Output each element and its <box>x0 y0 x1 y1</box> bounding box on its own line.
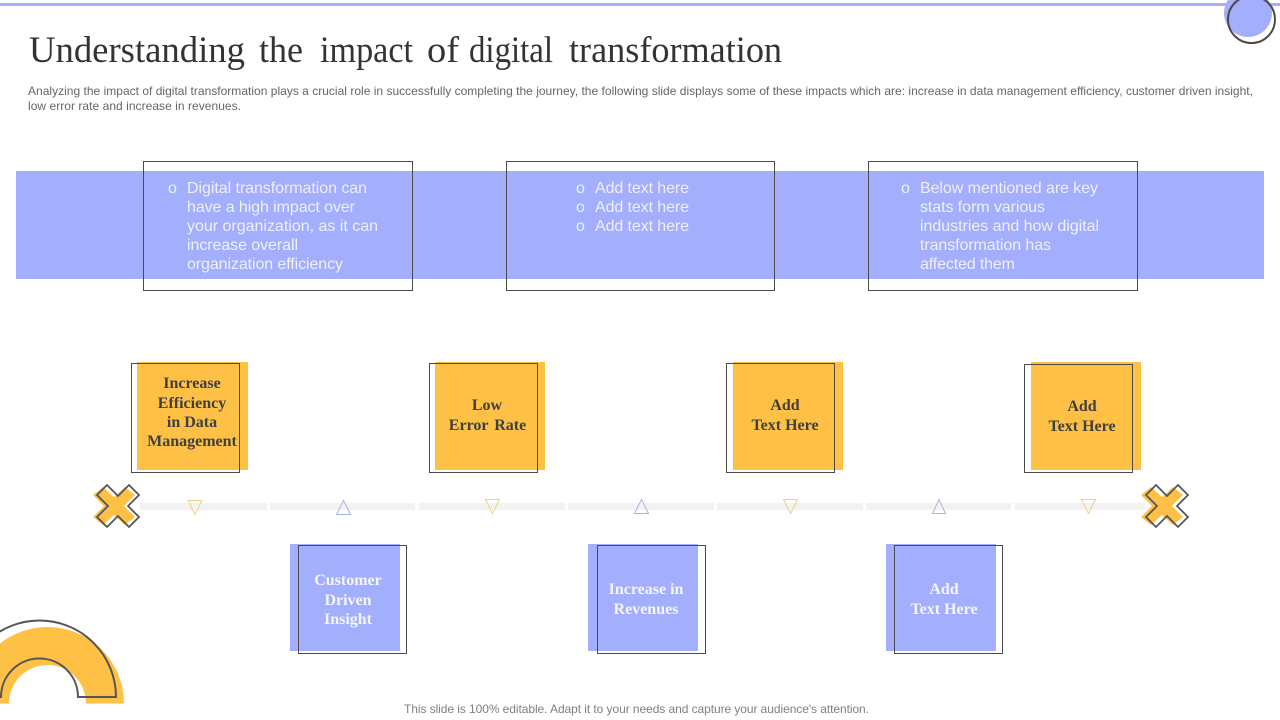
card: customer driven insight <box>290 544 406 654</box>
title: digital <box>469 30 553 71</box>
panel: add text: Add text here <box>595 199 689 216</box>
card: customer driven insight: Insight <box>324 611 373 628</box>
card: increase efficiency in data management: Efficiency <box>158 395 226 412</box>
blue band <box>16 171 1264 279</box>
panel: key stats: Below mentioned are key <box>920 180 1098 197</box>
card: low error rate: Low <box>472 397 503 414</box>
intro text <box>28 84 1253 113</box>
card: add text here 2: Text Here <box>1048 418 1116 435</box>
panel: digital transformation impact: organization efficiency <box>187 256 343 273</box>
card: add text here 1 <box>726 362 843 472</box>
title: the <box>259 30 303 71</box>
panel: digital transformation impact: Digital transformation can <box>187 180 367 197</box>
card: increase efficiency in data management: Management <box>147 433 238 450</box>
intro text: low error rate and increase in revenues. <box>28 99 241 113</box>
panel: add text <box>506 162 774 290</box>
card: increase in revenues <box>588 544 706 654</box>
timeline bar <box>140 503 1145 510</box>
title <box>29 30 782 71</box>
corner circle decoration <box>1224 0 1275 43</box>
icon: left cross <box>93 485 139 527</box>
title: transformation <box>569 30 782 71</box>
panel: digital transformation impact: increase overall <box>187 237 298 254</box>
panel: digital transformation impact: have a high impact over <box>187 199 356 216</box>
panel: add text: o <box>576 218 585 235</box>
panel: add text: o <box>576 180 585 197</box>
arch decoration <box>0 621 124 704</box>
icon: right cross <box>1141 485 1188 527</box>
intro text: Analyzing the impact of digital transformation plays a crucial role in successfully completing the journey, the following slide displays some of these impacts which are: increase in data management efficiency, customer driven insight, <box>28 84 1253 98</box>
panel: key stats: stats form various <box>920 199 1045 216</box>
card: add text here 1: Text Here <box>751 417 819 434</box>
card: increase efficiency in data management: in Data <box>167 414 217 431</box>
card: add text here 1: Add <box>770 397 800 414</box>
card: add text here 3: Add <box>929 581 959 598</box>
title: impact <box>320 30 414 71</box>
card: increase in revenues: Increase in <box>609 581 684 598</box>
card: low error rate <box>430 362 545 472</box>
panel: key stats <box>868 162 1138 290</box>
panel: key stats: transformation has <box>920 237 1051 254</box>
panel: digital transformation impact: o <box>168 180 177 197</box>
card: increase efficiency in data management: Increase <box>163 375 221 392</box>
card: add text here 3: Text Here <box>910 601 978 618</box>
card: add text here 2: Add <box>1067 398 1097 415</box>
footer note: This slide is 100% editable. Adapt it to your needs and capture your audience's attention. <box>404 702 869 716</box>
top accent bar <box>0 3 1280 6</box>
card: add text here 2 <box>1024 362 1141 472</box>
panel: key stats: affected them <box>920 256 1015 273</box>
title: Understanding <box>29 30 245 71</box>
title: of <box>427 30 460 71</box>
card: customer driven insight: Customer <box>314 572 382 589</box>
panel: add text: Add text here <box>595 180 689 197</box>
card: low error rate: Error Rate <box>449 417 526 434</box>
panel: key stats: o <box>901 180 910 197</box>
card: add text here 3 <box>886 544 1002 654</box>
panel: digital transformation impact <box>144 162 412 290</box>
panel: add text: Add text here <box>595 218 689 235</box>
panel: key stats: industries and how digital <box>920 218 1099 235</box>
panel: add text: o <box>576 199 585 216</box>
timeline markers <box>188 500 1096 514</box>
card: increase efficiency in data management <box>132 362 248 472</box>
card: customer driven insight: Driven <box>324 592 372 609</box>
card: increase in revenues: Revenues <box>614 601 678 618</box>
panel: digital transformation impact: your organization, as it can <box>187 218 378 235</box>
